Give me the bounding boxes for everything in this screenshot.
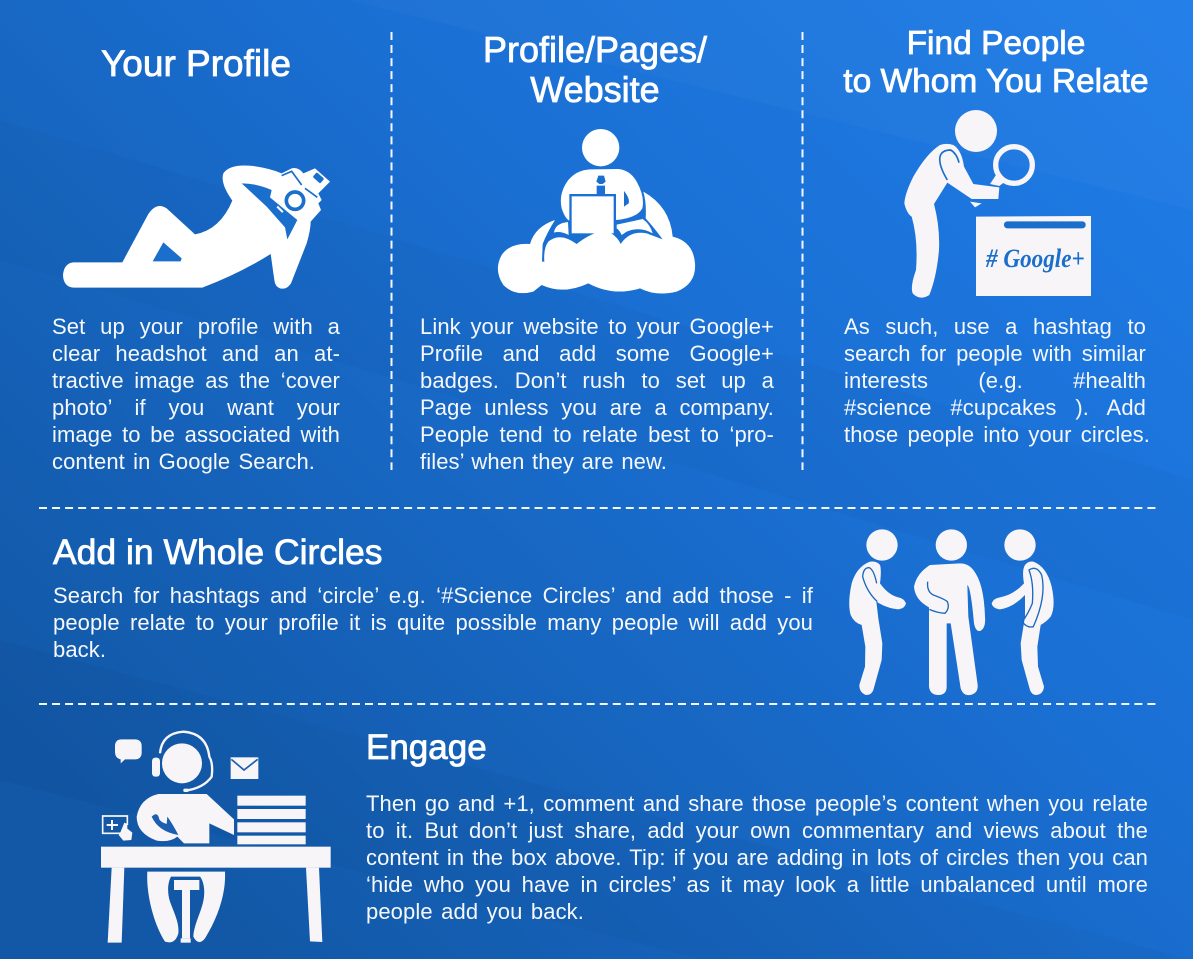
text: profile pages website: Profile and add some Google+ <box>420 341 774 366</box>
text: engage: ‘hide who you have in circles’ as it may look a little unbalanced until more <box>366 872 1148 897</box>
text: profile pages website: badges. Don’t rush to set up a <box>420 368 774 393</box>
icon: person with laptop on a cloud <box>498 129 696 294</box>
heading: engage: Engage <box>366 728 487 767</box>
text: profile pages website: files’ when they are new. <box>420 449 667 474</box>
text: profile pages website <box>420 314 774 474</box>
panel: profile pages website <box>420 29 774 474</box>
text: your profile: tractive image as the ‘cover <box>52 368 340 393</box>
heading: your profile: Your Profile <box>101 43 291 84</box>
panel: engage <box>101 728 1148 943</box>
text: profile pages website: People tend to relate best to ‘pro- <box>420 422 774 447</box>
text: find people <box>844 314 1150 447</box>
text: profile pages website: Page unless you are a company. <box>420 395 774 420</box>
icon: three people talking <box>849 529 1054 696</box>
text: your profile: photo’ if you want your <box>52 395 340 420</box>
icon: person at desk with headset <box>101 730 331 943</box>
text: add in whole circles: back. <box>53 637 106 662</box>
text: engage: content in the box above. Tip: if you are adding in lots of circles then you can <box>366 845 1148 870</box>
text: add in whole circles: people relate to your profile it is quite possible many people will add you <box>53 610 813 635</box>
icon: person lying down with camera <box>63 166 330 289</box>
text: add in whole circles <box>53 583 813 662</box>
text: engage: people add you back. <box>366 899 584 924</box>
text: your profile: image to be associated with <box>52 422 340 447</box>
text: engage: to it. But don’t just share, add your own commentary and views about the <box>366 818 1148 843</box>
label: # Google+: # Google+ <box>985 244 1085 273</box>
text: engage <box>366 791 1148 924</box>
text: find people: interests (e.g. #health <box>844 368 1146 393</box>
text: find people: #science #cupcakes ). Add <box>844 395 1146 420</box>
panel: add in whole circles <box>52 529 1054 696</box>
heading: find people <box>843 25 1149 100</box>
heading: profile pages website <box>483 29 708 110</box>
text: engage: Then go and +1, comment and share those people’s content when you relate <box>366 791 1148 816</box>
text: your profile <box>52 314 340 474</box>
text: find people: As such, use a hashtag to <box>844 314 1146 339</box>
text: your profile: content in Google Search. <box>52 449 315 474</box>
text: find people: search for people with similar <box>844 341 1146 366</box>
panel: find people <box>843 25 1150 447</box>
heading: add in whole circles: Add in Whole Circles <box>53 532 382 572</box>
text: add in whole circles: Search for hashtags and ‘circle’ e.g. ‘#Science Circles’ and add those - if <box>53 583 813 608</box>
text: your profile: clear headshot and an at- <box>52 341 340 366</box>
heading: profile pages website: Profile/Pages/ <box>483 29 707 70</box>
text: find people: those people into your circles. <box>844 422 1150 447</box>
panel: your profile <box>52 43 340 474</box>
heading: profile pages website: Website <box>530 69 660 110</box>
text: profile pages website: Link your website to your Google+ <box>420 314 774 339</box>
heading: find people: Find People <box>907 25 1085 62</box>
text: your profile: Set up your profile with a <box>52 314 340 339</box>
heading: find people: to Whom You Relate <box>843 63 1149 100</box>
icon: person with magnifier over google+ box <box>904 110 1091 298</box>
